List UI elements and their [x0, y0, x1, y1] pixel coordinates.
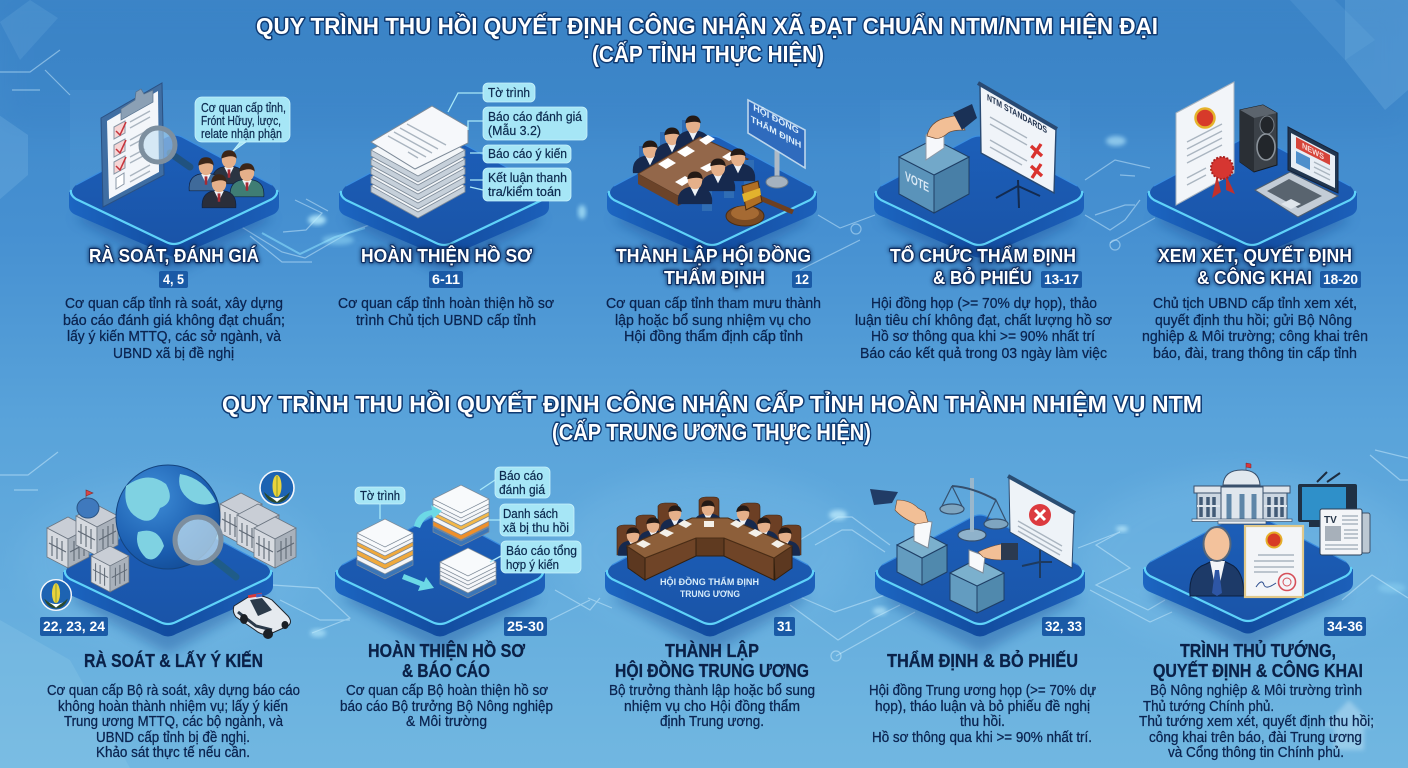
heading [615, 640, 809, 681]
icon: scales [940, 478, 1008, 541]
icon: meeting table [638, 135, 748, 206]
description: Hội đồng họp (>= 70% dự họp), thảo [871, 296, 1097, 312]
callouts: Báo cáo đánh giá [488, 110, 582, 124]
callout: Frónt Hữuy, lược, [201, 114, 281, 128]
callouts [355, 467, 581, 573]
callouts: hợp ý kiến [506, 558, 559, 572]
callout: relate nhận phận [201, 127, 282, 141]
description [1139, 683, 1374, 761]
circuit lines [0, 50, 1408, 661]
callouts: (Mẫu 3.2) [488, 123, 541, 138]
reference badge: 13-17 [1044, 272, 1079, 287]
reference badge: 6-11 [432, 272, 461, 287]
description: và Cổng thông tin Chính phủ. [1168, 745, 1344, 761]
description [869, 683, 1096, 746]
icon: left buildings [47, 490, 129, 592]
heading: TỔ CHỨC THẨM ĐỊNH [890, 245, 1076, 266]
description: Hội đồng Trung ương họp (>= 70% dự [869, 683, 1096, 699]
panel: Thành lập hội đồng trung ương [605, 497, 815, 730]
heading: & BỎ PHIẾU [933, 267, 1032, 288]
icon: globe [116, 465, 220, 569]
heading: RÀ SOÁT, ĐÁNH GIÁ [89, 245, 259, 266]
icon: standards board: NTM STANDARDS [987, 93, 1047, 137]
arrows [402, 505, 442, 591]
description [340, 683, 553, 730]
icon: sign board: THẨM ĐỊNH [751, 113, 801, 151]
heading: TRÌNH THỦ TƯỚNG, [1180, 640, 1336, 661]
heading: QUYẾT ĐỊNH & CÔNG KHAI [1153, 660, 1363, 681]
platform [339, 136, 549, 275]
title 2: (CẤP TRUNG ƯƠNG THỰC HIỆN) [552, 418, 871, 445]
callouts: Danh sách [503, 507, 558, 521]
icon: council members back row [633, 116, 710, 173]
panel: Hoàn thiện hồ sơ và báo cáo [335, 467, 581, 730]
callouts: đánh giá [499, 483, 545, 497]
panel: Rà soát và lấy ý kiến [40, 465, 300, 761]
description: UBND xã bị đề nghị [113, 346, 234, 362]
heading [890, 245, 1076, 288]
callouts: Kết luận thanh [488, 171, 567, 185]
reference badge [792, 271, 812, 288]
icon: document stacks [357, 485, 496, 598]
panel: Thẩm định và bỏ phiếu [869, 476, 1096, 746]
icon: council members [618, 500, 800, 556]
icon: right buildings [220, 493, 296, 568]
callouts: Tờ trình [488, 86, 530, 100]
description: báo cáo Bộ trưởng Bộ Nông nghiệp [340, 699, 553, 715]
icon: official [1190, 527, 1244, 596]
icon: laptop [1255, 127, 1338, 217]
heading [1158, 245, 1352, 288]
panel: Hoàn thiện hồ sơ [338, 83, 587, 329]
description: Hội đồng thẩm định cấp tỉnh [624, 329, 803, 345]
reference badge: 34-36 [1327, 619, 1364, 634]
reference badge: 25-30 [507, 619, 544, 634]
panel: Tổ chức thẩm định và bỏ phiếu [855, 83, 1112, 362]
description [47, 683, 300, 761]
description [606, 296, 821, 345]
description [338, 296, 554, 329]
heading: HOÀN THIỆN HỒ SƠ [361, 245, 532, 266]
platform [875, 515, 1085, 654]
reference badge: 18-20 [1323, 272, 1358, 287]
icon: hand [927, 104, 977, 138]
description: Bộ Nông nghiệp & Môi trường trình [1150, 683, 1362, 699]
description: & Môi trường [406, 714, 487, 730]
icon: newspaper: TV [1324, 515, 1337, 526]
heading [1153, 640, 1363, 681]
heading: XEM XÉT, QUYẾT ĐỊNH [1158, 245, 1352, 266]
icon: U-shaped table [627, 518, 792, 580]
description [1142, 296, 1368, 362]
platform [1143, 512, 1353, 651]
title 2: QUY TRÌNH THU HỒI QUYẾT ĐỊNH CÔNG NHẬN CẤP TỈNH HOÀN THÀNH NHIỆM VỤ NTM [222, 389, 1202, 417]
description: Chủ tịch UBND cấp tỉnh xem xét, [1153, 296, 1357, 312]
icon: hands [870, 489, 1018, 560]
description [609, 683, 815, 730]
reference badge [40, 617, 108, 636]
panel: Trình Thủ tướng, quyết định và công khai [1139, 463, 1374, 761]
description: báo, đài, trang thông tin cấp tỉnh [1153, 346, 1357, 362]
heading: HỘI ĐỒNG TRUNG ƯƠNG [615, 660, 809, 681]
reference badge: 31 [777, 619, 792, 634]
icon: chairs [617, 497, 801, 555]
description: Cơ quan cấp Bộ hoàn thiện hồ sơ [346, 683, 548, 699]
callouts: Báo cáo [499, 469, 543, 483]
heading: THẨM ĐỊNH [664, 267, 765, 288]
callouts: Báo cáo ý kiến [488, 147, 567, 161]
description: Thủ tướng xem xét, quyết định thu hồi; [1139, 714, 1374, 730]
description: Thủ tướng Chính phủ. [1143, 699, 1274, 715]
panel: Thành lập hội đồng thẩm định [606, 100, 821, 345]
description: thu hồi. [960, 714, 1005, 730]
description: Cơ quan cấp tỉnh hoàn thiện hồ sơ [338, 296, 554, 312]
icon: television [1298, 472, 1357, 527]
icon: ballot box: VOTE [905, 168, 929, 195]
callouts [483, 83, 587, 201]
description: công khai trên báo, đài Trung ương [1149, 730, 1362, 746]
icon: decree certificate [1245, 526, 1303, 597]
icon: magnifier [175, 517, 236, 577]
description: định Trung ương. [660, 714, 764, 730]
description: nhiệm vụ cho Hội đồng thẩm [624, 699, 800, 715]
icon: laptop: NEWS [1302, 141, 1324, 162]
platform [605, 515, 815, 654]
icon: newspaper [1320, 509, 1370, 555]
description: không hoàn thành nhiệm vụ; lấy ý kiến [58, 699, 288, 715]
description: lập hoặc bổ sung nhiệm vụ cho [615, 313, 811, 329]
icon: document stack [371, 106, 468, 218]
heading [616, 245, 811, 288]
platform [874, 136, 1084, 275]
platform label: TRUNG ƯƠNG [680, 589, 740, 600]
icon: sign board [748, 100, 805, 188]
heading: & CÔNG KHAI [1197, 267, 1312, 288]
description: Trung ương MTTQ, các bộ ngành, và [64, 714, 284, 730]
reference badge: 32, 33 [1045, 619, 1082, 634]
icon: emblem [260, 471, 294, 505]
reference badge [1324, 617, 1366, 636]
description: Hồ sơ thông qua khi >= 90% nhất trí. [872, 730, 1092, 746]
callouts: Báo cáo tổng [506, 544, 577, 558]
icon: people [189, 150, 264, 208]
callouts: Tờ trình [360, 489, 400, 503]
description: Bộ trưởng thành lập hoặc bổ sung [609, 683, 815, 699]
heading: RÀ SOÁT & LẤY Ý KIẾN [84, 650, 263, 671]
callout: Cơ quan cấp tỉnh, [201, 101, 286, 115]
panel: Rà soát, đánh giá [63, 83, 290, 362]
description: quyết định thu hồi; gửi Bộ Nông [1155, 313, 1352, 329]
icon: gavel [726, 181, 793, 226]
icon: standards board [978, 83, 1057, 208]
platform [607, 136, 817, 275]
icon: presentation board [1008, 476, 1075, 578]
platform label [660, 576, 759, 600]
heading: & BÁO CÁO [402, 660, 490, 681]
title 1 [256, 12, 1158, 67]
reference badge [774, 617, 795, 636]
description: Hồ sơ thông qua khi >= 90% nhất trí [871, 329, 1095, 345]
description: Cơ quan cấp Bộ rà soát, xây dựng báo cáo [47, 683, 300, 699]
platform [1147, 136, 1357, 275]
description [63, 296, 285, 362]
heading: THÀNH LẬP HỘI ĐỒNG [616, 245, 811, 266]
icon: government building [1192, 463, 1292, 524]
description: họp), tháo luận và bỏ phiếu đề nghị [875, 699, 1090, 715]
reference badge: 22, 23, 24 [43, 619, 105, 634]
icon: certificate [1176, 82, 1235, 205]
heading: THÀNH LẬP [665, 640, 759, 661]
description: trình Chủ tịch UBND cấp tỉnh [356, 313, 536, 329]
leader lines [448, 93, 483, 190]
description: luận tiêu chí không đạt, chất lượng hồ sơ [855, 313, 1112, 329]
reference badge [1042, 617, 1085, 636]
reference badge [429, 271, 463, 288]
platform [63, 515, 273, 654]
platform label: HỘI ĐỒNG THẨM ĐỊNH [660, 576, 759, 588]
description: nghiệp & Môi trường; công khai trên [1142, 329, 1368, 345]
icon: emblem [41, 580, 71, 610]
icon: police car [233, 593, 290, 639]
icon: clipboard [101, 83, 164, 207]
reference badge: 4, 5 [163, 272, 184, 287]
description: Báo cáo kết quả trong 03 ngày làm việc [860, 346, 1107, 362]
reference badge: 12 [795, 272, 809, 287]
icon: ballot box [899, 122, 969, 213]
icon: magnifier [141, 128, 190, 167]
icon: council members front row [678, 149, 755, 211]
icon: speaker [1240, 105, 1277, 172]
description [855, 296, 1112, 362]
description: UBND cấp tỉnh bị đề nghị. [96, 730, 250, 746]
reference badge [504, 617, 547, 636]
title 1: QUY TRÌNH THU HỒI QUYẾT ĐỊNH CÔNG NHẬN XÃ ĐẠT CHUẨN NTM/NTM HIỆN ĐẠI [256, 12, 1158, 39]
callouts: xã bị thu hồi [503, 521, 569, 535]
callouts: tra/kiểm toán [488, 185, 561, 199]
platform [335, 515, 545, 654]
panel: Xem xét, quyết định và công khai [1142, 82, 1368, 362]
callout [195, 97, 290, 152]
icon: sign board: HỘI ĐỒNG [753, 102, 799, 137]
description: lấy ý kiến MTTQ, các sở ngành, và [67, 329, 282, 345]
leader lines [380, 480, 501, 562]
icon: ballot boxes [897, 520, 1004, 613]
title 1: (CẤP TỈNH THỰC HIỆN) [592, 39, 824, 67]
heading: HOÀN THIỆN HỒ SƠ [368, 640, 526, 661]
heading [368, 640, 526, 681]
title 2 [222, 389, 1202, 445]
description: báo cáo đánh giá không đạt chuẩn; [63, 313, 285, 329]
description: Cơ quan cấp tỉnh tham mưu thành [606, 296, 821, 312]
description: Khảo sát thực tế nếu cần. [96, 745, 250, 761]
heading: THẨM ĐỊNH & BỎ PHIẾU [887, 650, 1078, 671]
description: Cơ quan cấp tỉnh rà soát, xây dựng [65, 296, 283, 312]
platform [69, 135, 279, 274]
reference badge [159, 271, 188, 288]
